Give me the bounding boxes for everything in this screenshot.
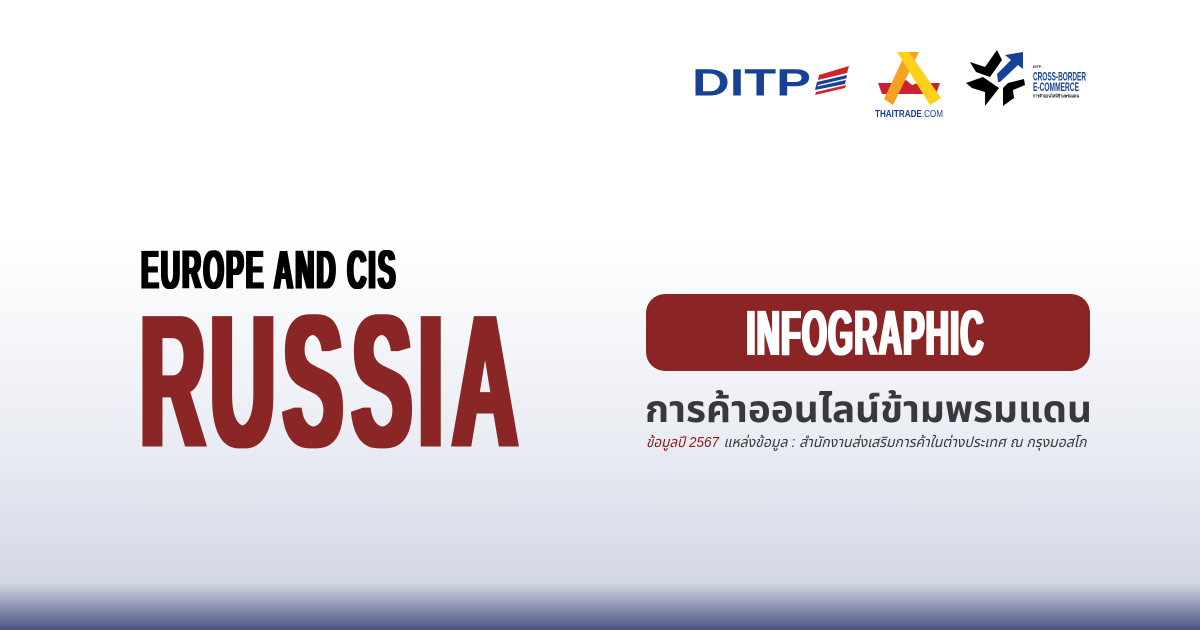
logo: DITP: DITP — [692, 62, 811, 104]
wordmark: E-COMMERCE — [1033, 80, 1079, 94]
logo: DITP — [692, 62, 849, 104]
title: Russia: RUSSIA — [140, 278, 518, 487]
source note: ข้อมูลปี 2567 — [646, 434, 720, 451]
wordmark: การค้าออนไลน์ข้ามพรมแดน — [1033, 92, 1080, 98]
wordmark: DITP — [1033, 65, 1042, 69]
icon: black star with blue arrow — [966, 50, 1025, 106]
thaitrade wordmark: THAITRADE.COM — [875, 109, 943, 120]
badge label: INFOGRAPHIC — [746, 297, 984, 369]
subheading: Europe and CIS: EUROPE AND CIS — [141, 240, 396, 301]
infographic badge — [646, 294, 1090, 371]
wordmark: CROSS-BORDER — [1033, 70, 1086, 84]
wordmark — [1033, 65, 1086, 98]
logo: Thaitrade — [875, 52, 943, 120]
source note: แหล่งข้อมูล : สำนักงานส่งเสริมการค้าในต่างประเทศ ณ กรุงมอสโก — [724, 434, 1088, 451]
Thai heading: การค้าออนไลน์ข้ามพรมแดน — [645, 389, 1092, 430]
icon: Thai flag stripes — [815, 66, 849, 95]
logo: Cross-border e-commerce — [966, 50, 1086, 106]
